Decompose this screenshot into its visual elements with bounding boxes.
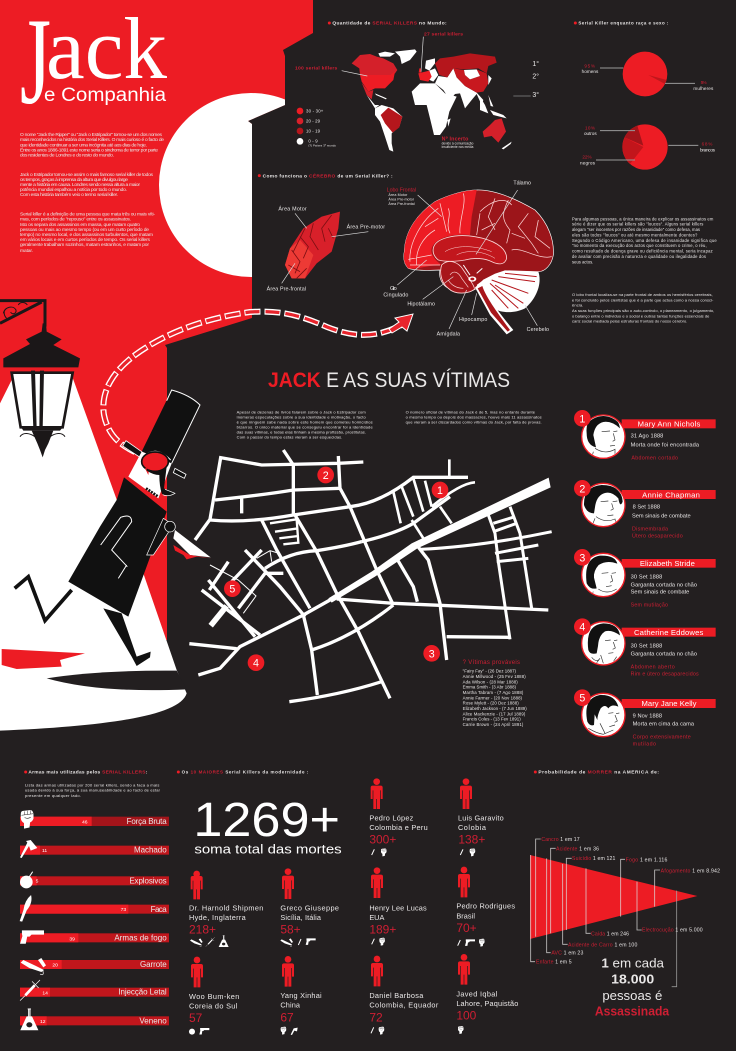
- killer: Pedro López: Colombia e Peru: [369, 823, 428, 832]
- bar: Injecção Letal: [20, 980, 169, 1001]
- killer: Woo Bum-kon: Woo Bum-ken: [189, 992, 239, 1001]
- brain labels: Área Pre-frontal: [388, 202, 415, 206]
- victim 1: [574, 410, 716, 462]
- brain labels: Giro: [390, 286, 397, 292]
- victim 3: Sem mutilação: [631, 603, 668, 609]
- rank markers: 3°: [532, 91, 539, 99]
- killer: Greco Giuseppe: 58+: [280, 922, 301, 936]
- murder statistic: Assassinada: [595, 1005, 670, 1019]
- probable victims list: Emma Smith - (3 Abr 1888): [463, 685, 517, 690]
- insanity text: série é dizer que os serial killers são "loucos". Alguns serial killers: [572, 222, 703, 227]
- intro left: das suas vítimas, e todas elas tinham a mesma profissão, prostitutas.: [237, 429, 366, 434]
- world map section: [295, 21, 716, 170]
- intro right: [406, 409, 542, 424]
- intro text block: os tempos, graças à imprensa da altura que divulgou large: [20, 177, 128, 183]
- killer: Javed Iqbal: Lahore, Paquistão: [456, 999, 518, 1008]
- map legend: 30 - 30+: [306, 108, 324, 113]
- killer: Daniel Barbosa: 72: [369, 1010, 383, 1024]
- bar: Garrote: 20: [52, 963, 58, 969]
- killer: Javed Iqbal: [456, 954, 518, 1034]
- legs: [15, 577, 72, 621]
- rank markers: 1°: [532, 60, 539, 68]
- bar: Injecção Letal: Injecção Letal: [118, 988, 167, 997]
- probability labels: Afogamento 1 em 8.942: [661, 869, 720, 875]
- victim 4: [574, 618, 716, 678]
- victim 2: [574, 480, 716, 540]
- world map: [352, 49, 512, 152]
- killer: Pedro Rodrigues: [456, 867, 515, 947]
- brain section: [258, 171, 717, 337]
- map markers: 1: [437, 485, 443, 497]
- map callouts: [295, 31, 474, 149]
- intro text block: mais reconhecidos na história dos Serial Killers. O mais curioso é o facto de: [20, 137, 164, 143]
- insanity text: Para algumas pessoas, a única maneira de explicar os assassinatos em: [572, 217, 714, 222]
- probable victims list: "Fairy Fay" - (26 Dez 1887): [463, 669, 517, 674]
- intro text block: mas, com períodos de "repouso" entre os assassinatos.: [20, 216, 131, 222]
- murder statistic: pessoas é: [602, 989, 662, 1003]
- killer: Greco Giuseppe: Sicília, Itália: [280, 913, 322, 922]
- probable victims list: ? Vítimas prováveis: [463, 660, 520, 666]
- title: ack: [46, 1, 167, 98]
- red sky panel with building silhouette: [0, 0, 313, 640]
- bar: Força Bruta: 46: [82, 820, 88, 826]
- intro text block: [20, 132, 164, 254]
- victim 4: Garganta cortada no chão: [631, 652, 697, 658]
- killer: Javed Iqbal: 100: [456, 1009, 477, 1023]
- intro left: é que ninguém sabe nada sobre este homem que cometeu homicídios: [237, 419, 373, 424]
- lamp bracket: [0, 301, 45, 327]
- moon behind the building: [159, 93, 285, 277]
- intro text block: que identidade continuar a ser uma incógnita até aos dias de hoje.: [20, 142, 147, 148]
- bar: Força Bruta: [20, 810, 169, 829]
- top 10 heading: Os 10 MAIORES Serial Killers da modernidade :: [182, 770, 309, 775]
- map legend: 20 - 29: [306, 118, 321, 123]
- race and sex heading: Serial Killer enquanto raça e sexo :: [578, 21, 669, 26]
- intro text block: Isto os separa dos assassinos em massa, que matam quatro: [20, 222, 140, 228]
- intro text block: O nome "Jack the Ripper" ou "Jack o Estripador" tornou-se um dos nomes: [20, 132, 163, 138]
- intro right: o mesmo tempo ou depois dos massacres, houve mais 11 assassinatos: [406, 414, 542, 419]
- intro text block: potência mundial espalhou a notícia por todo o mundo.: [20, 187, 127, 193]
- title: [20, 0, 167, 130]
- victim 2: Sem sinais de combate: [632, 514, 691, 520]
- victim 5: Morta em cima da cama: [633, 721, 695, 727]
- pie chart: sex: [582, 52, 714, 96]
- victim 3: [574, 549, 716, 609]
- probability heading: Probabilidade de MORRER na AMERICA de:: [538, 770, 659, 776]
- intro text block: Entre os anos 1886-1891 este nome seria o sindroma de terror por parte: [20, 148, 158, 154]
- intro text block: tempo) no mesmo local, e dos assassinos turbulentos, que matam: [20, 232, 153, 238]
- murder statistic: 1 em cada: [601, 956, 665, 970]
- lamp: [3, 323, 80, 457]
- intro right: O número oficial de vítimas do Jack é de 5, mas no entanto durante: [406, 409, 536, 414]
- victim 2: Annie Chapman: [642, 490, 700, 499]
- map legend: (?) Países 3º mundo: [308, 143, 336, 147]
- killer: Yang Xinhai: Yang Xinhai: [280, 991, 322, 1000]
- intro text block: matar.: [20, 248, 33, 254]
- victim 1: 1: [579, 413, 585, 425]
- map callouts: insuficiente nos media: [442, 145, 474, 149]
- killer: Harold Shipman: Dr. Harnold Shipmen: [189, 903, 263, 912]
- killer: Greco Giuseppe: Greco Giuseppe: [280, 903, 339, 912]
- pie chart: race: 68%: [702, 142, 712, 147]
- weapons heading: Armas mais utilizadas pelos SERIAL KILLERS:: [28, 770, 148, 776]
- probability labels: Electrocução 1 em 5.000: [642, 928, 703, 934]
- map markers: [224, 467, 448, 671]
- victim 3: 3: [579, 552, 585, 564]
- insanity text: como resultado de doença grave ou deficiência mental, seria incapaz: [572, 248, 713, 253]
- probability labels: Enfarte 1 em 5: [536, 960, 572, 966]
- dashed arrow from Jack to brain: [103, 312, 413, 452]
- bar: Veneno: [20, 1009, 169, 1030]
- bar: Faca: [20, 895, 169, 922]
- bar: Garrote: [20, 958, 169, 975]
- intro right: que vieram a ser discardados como vítimas do Jack, por falta de provas.: [406, 419, 542, 424]
- bar: Machado: Machado: [134, 846, 167, 855]
- bar: Armas de fogo: 39: [69, 936, 75, 942]
- victim 4: Catherine Eddowes: [634, 628, 704, 637]
- killer: Pedro Rodrigues: Pedro Rodrigues: [456, 902, 515, 911]
- total deaths: soma total das mortes: [194, 842, 342, 856]
- insanity text: alegam "ser inocentes por razões de insanidade" como defesa, mas: [572, 227, 700, 232]
- probability section: [530, 770, 720, 1019]
- insanity text: eles são todos "loucos" ou até mesmo mentalmente doentes?: [572, 232, 698, 237]
- bar: Machado: 11: [42, 848, 47, 854]
- brain labels: Cingulado: [383, 293, 408, 299]
- probability labels: Fogo 1 em 1.116: [626, 857, 667, 863]
- street lamp and Jack figure: [0, 301, 212, 731]
- map markers: 2: [323, 470, 329, 482]
- moustache: [147, 467, 175, 496]
- brain labels: Lobo Frontal: [387, 188, 416, 194]
- victim 5: Mary Jane Kelly: [641, 699, 697, 708]
- probable victims list: Martha Tabram - (7 Ago 1888): [463, 690, 524, 695]
- killer: Luis Garavito: 138+: [458, 832, 485, 846]
- intro text block: pessoas ou mais ao mesmo tempo (ou em um curto período de: [20, 227, 149, 233]
- probability labels: Suicídio 1 em 121: [572, 856, 615, 862]
- brain labels: Amígdala: [437, 331, 460, 337]
- bar: Veneno: Veneno: [139, 1016, 167, 1025]
- weapons intro: presente em qualquer lado.: [25, 793, 81, 798]
- killer: Pedro López: [369, 778, 428, 856]
- map callouts: devido à comunicação: [442, 141, 474, 145]
- weapons intro: [25, 782, 161, 798]
- probable victims list: Alice Mackenzie - (17 Jul 1889): [463, 711, 526, 716]
- bar: Faca: Faca: [151, 905, 167, 914]
- weapons intro: Lista das armas utilizadas por 200 serial killers, sendo a faca a mais: [25, 782, 159, 787]
- small brain: frontal lobe: [285, 212, 340, 278]
- probable victims list: [463, 660, 527, 727]
- probable victims list: Francis Coles - (13 Fev 1891): [463, 717, 521, 722]
- victim 5: 9 Nov 1888: [633, 714, 662, 720]
- intro left: Com o passar do tempo estas vieram a ser esquecidas.: [237, 434, 342, 439]
- murder statistic: [595, 956, 670, 1019]
- killer: Harold Shipman: 218+: [189, 922, 216, 936]
- frontal lobe text: ência.: [572, 303, 583, 308]
- victim 5: 5: [579, 693, 585, 705]
- insanity text: "no momento da execução dos actos que constituem o crime, o réu,: [572, 243, 707, 248]
- pie chart: race: brancos: [700, 147, 716, 152]
- killer: Woo Bum-kon: [189, 957, 239, 1035]
- mouth: [146, 488, 158, 497]
- victim 3: Elizabeth Stride: [640, 559, 695, 568]
- probability labels: Acidente de Carro 1 em 100: [568, 942, 637, 948]
- killer: Harold Shipman: Hyde, Inglaterra: [189, 913, 247, 922]
- killer: Pedro López: Pedro López: [369, 814, 414, 823]
- probability labels: Caída 1 em 246: [591, 931, 629, 937]
- bar: Injecção Letal: 14: [42, 990, 48, 996]
- probable victims list: Annie Millwood - (25 Fev 1888): [463, 674, 526, 679]
- intro left: Apesar de dezenas de livros falarem sobre o Jack o Estripador com: [237, 409, 366, 414]
- pie chart: race: [580, 124, 716, 170]
- victim 3: 30 Set 1888: [631, 574, 662, 580]
- map legend: [297, 108, 336, 147]
- intro left: [237, 409, 373, 439]
- brain heading: [258, 171, 393, 179]
- killer: Daniel Barbosa: Colombia, Equador: [369, 1001, 439, 1010]
- frontal lobe text: cariz social mediada pelas estruturas frontais do nosso cérebro.: [572, 319, 687, 324]
- title: e Companhia: [44, 85, 166, 106]
- brain labels: [267, 180, 549, 337]
- probability labels: [536, 837, 720, 966]
- jack figure: [15, 390, 212, 666]
- victim 2: Dismembrada: [632, 527, 668, 533]
- light cone: [0, 375, 187, 731]
- victim 3: Garganta cortada no chão: [631, 582, 697, 588]
- top 10 killers section: [177, 770, 518, 1035]
- pie chart: sex: 5%: [701, 80, 707, 85]
- probable victims list: Rose Mylett - (20 Dez 1888): [463, 701, 519, 706]
- map callouts: Nº Incerto: [442, 137, 469, 143]
- killer: Pedro Rodrigues: Brasil: [456, 911, 475, 920]
- victim 1: Abdomen cortado: [631, 456, 678, 462]
- killer: Woo Bum-kon: Coreia do Sul: [189, 1001, 238, 1010]
- victim 2: Útero desaparecido: [632, 533, 683, 540]
- killer: Daniel Barbosa: Daniel Barbosa: [369, 991, 424, 1000]
- bar: Armas de fogo: Armas de fogo: [114, 934, 167, 943]
- probability labels: Acidente 1 em 36: [556, 846, 599, 852]
- probability labels: Cancro 1 em 17: [541, 837, 580, 843]
- victim 4: Abdomen aberto: [631, 665, 675, 671]
- hat: [142, 390, 200, 464]
- weapons section: [20, 770, 169, 1030]
- map markers: 5: [229, 584, 235, 596]
- blood pool: [2, 649, 85, 669]
- exposed brain: [142, 451, 171, 460]
- total deaths: 1269+: [193, 793, 340, 847]
- map legend: 10 - 19: [306, 129, 321, 134]
- bar: Armas de fogo: [20, 930, 169, 944]
- victim 1: 31 Ago 1888: [631, 433, 663, 439]
- intro text block: em vários locais e em curtos períodos de tempo. Os serial killers: [20, 237, 151, 243]
- killer: Luis Garavito: Luis Garavito: [458, 814, 504, 823]
- brain labels: Área Pre-motor: [347, 224, 385, 231]
- brain labels: Tálamo: [513, 180, 531, 186]
- victims section: map: [189, 409, 552, 727]
- victim 4: 30 Set 1888: [631, 644, 662, 650]
- bar: Garrote: Garrote: [140, 960, 167, 969]
- brain heading: Como funciona o CÉREBRO de um Serial Killer? :: [263, 171, 393, 179]
- frontal lobe text: As suas funções principais são o auto-controlo, o planeamento, o julgamento,: [572, 308, 714, 313]
- pie chart: race: 22%: [582, 154, 592, 159]
- heading: Jack e as suas vítimas: JACK E AS SUAS VÍTIMAS: [268, 367, 510, 392]
- victims list: [574, 410, 716, 747]
- frontal lobe text: e foi concluído pelos cientistas que é a parte que actua como a nossa consci-: [572, 297, 714, 302]
- pie chart: sex: homens: [582, 69, 599, 74]
- killer: Yang Xinhai: [280, 956, 322, 1035]
- killer: Greco Giuseppe: [280, 868, 339, 947]
- brain labels: Área Pre-frontal: [267, 285, 306, 292]
- killer: Woo Bum-kon: 57: [189, 1011, 203, 1025]
- insanity text: Segundo o Código Americano, uma defesa de insanidade significa que: [572, 238, 717, 243]
- brain labels: Área Motor: [388, 193, 408, 197]
- victim 1: Mary Ann Nichols: [638, 420, 701, 429]
- victim 5: Corpo extensivamente: [633, 735, 691, 741]
- pie chart: race: negros: [580, 160, 596, 165]
- map callouts: 27 serial killers: [424, 31, 463, 37]
- killer: Pedro Rodrigues: 70+: [456, 921, 477, 935]
- victim 1: Morta onde foi encontrada: [631, 442, 700, 448]
- pie chart: sex: mulheres: [693, 86, 714, 91]
- bar: Machado: [20, 840, 169, 858]
- probable victims list: Annie Farmer - (20 Nov 1888): [463, 695, 523, 700]
- probable victims list: Ada Wilson - (28 Mar 1888): [463, 679, 518, 684]
- killer: Luis Garavito: [458, 778, 504, 856]
- intro left: inúmeras especulações sobre a sua identidade e motivação, o facto: [237, 414, 366, 419]
- bar: Explosivos: 5: [36, 879, 39, 885]
- map markers: 4: [253, 658, 259, 670]
- victim 4: Rim e útero desaparecidos: [631, 672, 699, 678]
- intro text block: geralmente trabalham sozinhos, matam estranhos, e matam por: [20, 242, 149, 248]
- brain labels: Área Motor: [278, 205, 307, 212]
- intro text block: mente a história em causa. Londres sendo nessa altura a maior: [20, 182, 140, 188]
- killer: Pedro López: 300+: [369, 832, 396, 846]
- brain labels: Hipotálamo: [407, 302, 435, 308]
- insanity text: de avaliar com precisão a natureza e qualidade ou ilegalidade dos: [572, 254, 706, 259]
- pie chart: race: 10%: [585, 126, 595, 131]
- coat: [68, 477, 167, 617]
- victim 2: 2: [579, 483, 585, 495]
- killer: Henry Lee Lucas: 189+: [369, 922, 396, 936]
- weapons intro: usada devido à sua força, à sua manuseabilidade e ao facto de estar: [25, 787, 161, 792]
- brackets: [531, 839, 677, 987]
- frontal lobe text: O lobo frontal localiza-se na parte frontal de ambos os hemisférios cerebrais,: [572, 292, 713, 297]
- killer: Yang Xinhai: China: [280, 1001, 301, 1010]
- intro text block: Jack o Estripador tornou-se assim o mais famoso serial killer de todos: [20, 172, 154, 178]
- intro left: bizarros. O único material que se conseguiu encontrar foi a identidade: [237, 424, 373, 429]
- pie chart: race: outros: [584, 131, 597, 136]
- street map: [189, 450, 552, 702]
- killer: Luis Garavito: Colobia: [458, 823, 487, 832]
- shadow: [47, 671, 187, 690]
- victim 3: Sem sinais de combate: [631, 590, 689, 596]
- map legend: 0 - 9: [308, 138, 318, 143]
- bar: Explosivos: [20, 872, 169, 888]
- murder statistic: 18.000: [611, 972, 654, 986]
- pie chart: sex: 95%: [584, 63, 595, 68]
- rank markers: 2°: [532, 73, 539, 81]
- knife arm: [147, 518, 173, 555]
- victim 4: 4: [579, 622, 585, 634]
- killer: Daniel Barbosa: [369, 956, 439, 1035]
- brain labels: Hipocampo: [459, 317, 487, 323]
- intro text block: Serial killer é a definição de uma pessoa que mata três ou mais víti-: [20, 212, 155, 218]
- killer: Harold Shipman: [189, 871, 263, 947]
- killer: Henry Lee Lucas: [369, 867, 427, 946]
- probable victims list: Elizabeth Jackson - (7 Jun 1889): [463, 706, 527, 711]
- big brain: [404, 190, 553, 334]
- insanity text: seus actos.: [572, 259, 593, 264]
- killer: Yang Xinhai: 67: [280, 1010, 294, 1024]
- insanity text: [572, 217, 717, 264]
- victim 5: [574, 689, 716, 747]
- intro text block: Com esta história também veio o termo serial killer.: [20, 192, 118, 198]
- bar: Força Bruta: Força Bruta: [127, 817, 167, 826]
- rank markers: [513, 60, 539, 99]
- map heading: Quantidade de SERIAL KILLERS no Mundo:: [332, 21, 447, 27]
- probable victims list: Carrie Brown - (24 April 1891): [463, 722, 524, 727]
- bar: Faca: 73: [121, 907, 126, 913]
- bar: Veneno: 12: [40, 1019, 46, 1025]
- intro text block: dos residentes de Londres e do resto do mundo.: [20, 152, 114, 158]
- probability labels: AVC 1 em 23: [551, 951, 583, 957]
- killer: Henry Lee Lucas: EUA: [369, 913, 384, 922]
- head: [128, 452, 172, 498]
- map markers: 3: [429, 648, 435, 660]
- victim 5: mutilado: [633, 741, 656, 747]
- frontal lobe text: [572, 292, 714, 324]
- killer: Javed Iqbal: Javed Iqbal: [456, 990, 498, 999]
- killer: Henry Lee Lucas: Henry Lee Lucas: [369, 903, 427, 912]
- brain labels: Área Pre-motor: [388, 197, 415, 201]
- brain labels: Cerebelo: [527, 327, 549, 333]
- map callouts: 100 serial killers: [295, 66, 338, 72]
- probability triangle: [530, 855, 697, 939]
- frontal lobe text: o balanço entre o indivíduo e o social e outras tantas funções essenciais de: [572, 313, 710, 318]
- bar: Explosivos: Explosivos: [129, 876, 167, 885]
- victim 2: 8 Set 1888: [633, 505, 660, 511]
